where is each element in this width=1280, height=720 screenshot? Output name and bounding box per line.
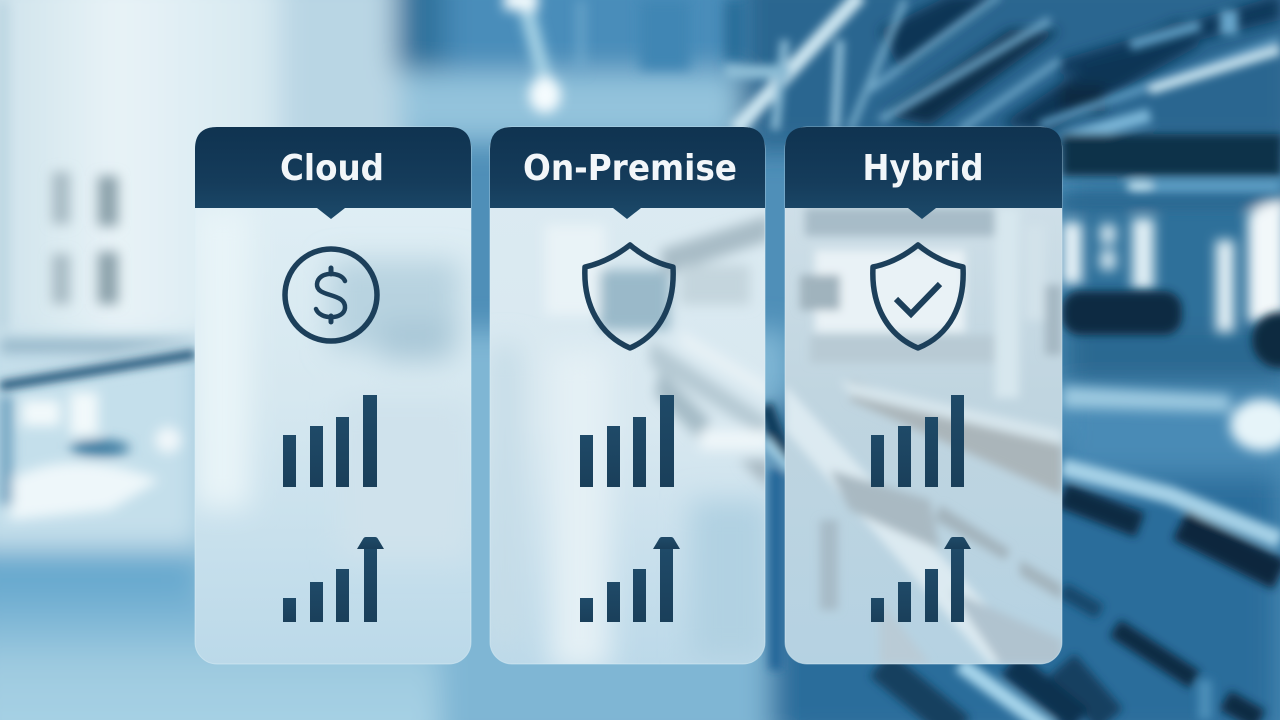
bar chart: rising bars bbox=[871, 395, 964, 487]
ceiling diagonals bbox=[735, 0, 860, 130]
bar chart: rising bars bbox=[283, 395, 377, 487]
bar chart: growth arrow bbox=[871, 537, 971, 622]
bar chart: rising bars bbox=[580, 395, 674, 487]
icon: shield bbox=[585, 245, 673, 348]
left wall windows bbox=[0, 0, 6, 330]
right side windows bbox=[1062, 222, 1082, 284]
lower right shelves bbox=[1062, 467, 1280, 540]
header: Cloud: Cloud bbox=[280, 148, 384, 189]
streak under hybrid panel bbox=[960, 664, 1050, 720]
panel: On-Premise bbox=[490, 127, 770, 670]
header: Hybrid: Hybrid bbox=[862, 148, 984, 189]
header: Cloud bbox=[195, 127, 471, 219]
panel: Hybrid bbox=[785, 127, 1062, 664]
dark beam bbox=[1062, 134, 1280, 176]
left counter and floor highlights bbox=[0, 338, 195, 354]
bar chart: growth arrow bbox=[580, 537, 680, 622]
right end dark masses bbox=[880, 0, 1000, 70]
table glare bbox=[1230, 399, 1280, 451]
header: Hybrid bbox=[785, 127, 1062, 219]
ceiling highlights bbox=[514, 0, 552, 80]
header: On-Premise: On-Premise bbox=[523, 148, 737, 189]
rollers bbox=[1062, 291, 1182, 335]
header: On-Premise bbox=[490, 127, 765, 219]
bar chart: growth arrow bbox=[283, 537, 384, 622]
icon: shield with check bbox=[873, 245, 963, 348]
panel: Cloud bbox=[195, 127, 471, 664]
left dark counter edge bbox=[0, 354, 195, 386]
icon: dollar coin bbox=[285, 249, 377, 341]
